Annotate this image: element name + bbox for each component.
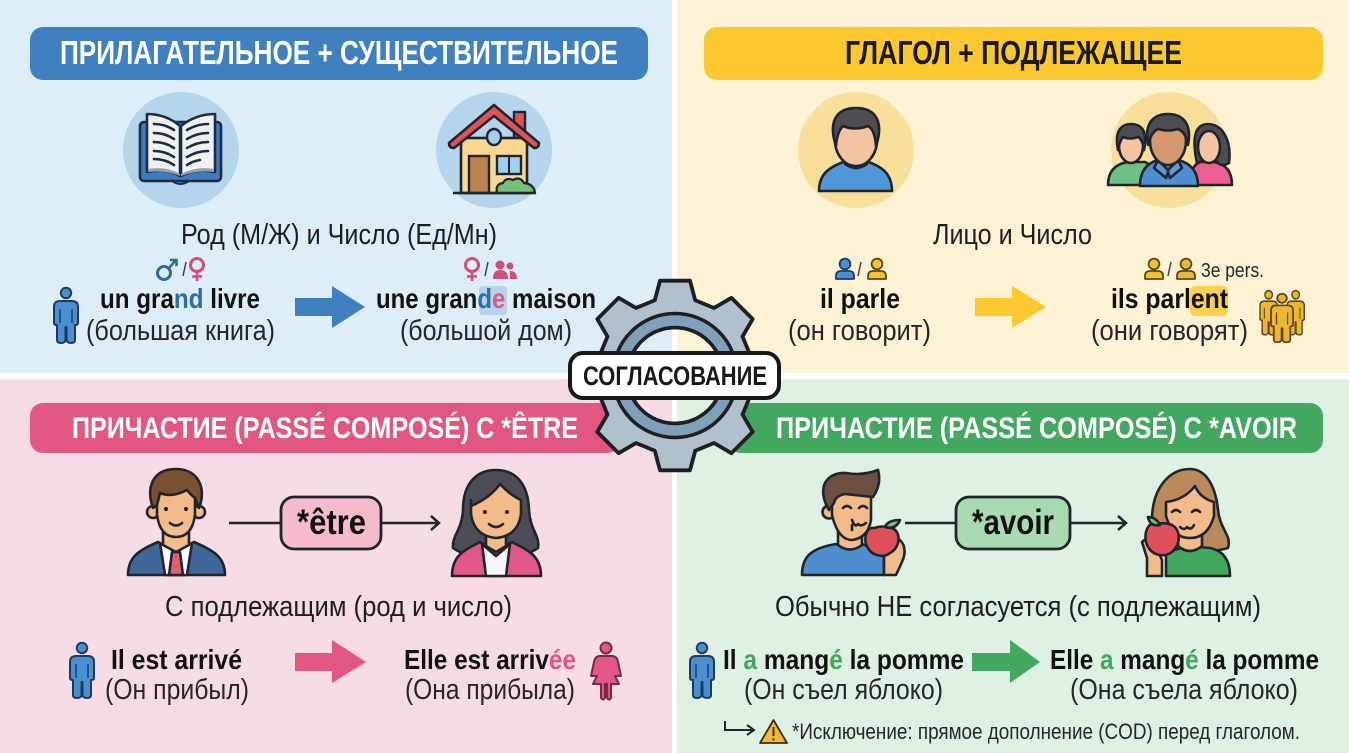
example: feminine plural	[376, 283, 596, 347]
icon: gold group figures	[1260, 291, 1304, 342]
connector with être label: *être	[297, 503, 366, 542]
example: singular verb: (он говорит)	[788, 315, 931, 347]
example: plural verb: (они говорят)	[1091, 315, 1248, 347]
icon: group of three people	[1108, 92, 1232, 208]
text: gender and number: Род (М/Ж) и Число (Ед/Мн)	[181, 219, 497, 251]
example: feminine with avoir: Elle a mangé la pomme	[1050, 644, 1319, 675]
example: feminine participle: (Она прибыла)	[405, 674, 575, 706]
icon: man in suit	[128, 469, 225, 575]
icons: feminine and plural symbols	[466, 258, 517, 281]
icons: person markers	[836, 259, 886, 279]
icons: third person markers	[1145, 259, 1264, 282]
icon: pink woman figure	[591, 642, 621, 700]
heading: participle with être: ПРИЧАСТИЕ (PASSÉ COMPOSÉ) C *ÊTRE	[72, 411, 578, 445]
icon: woman eating apple	[1142, 469, 1230, 576]
example: feminine with avoir	[1050, 644, 1319, 706]
heading: adjective + noun	[30, 27, 648, 80]
connector with être label	[229, 497, 439, 549]
heading: participle with avoir	[728, 403, 1323, 453]
example: masculine singular: un grand livre	[100, 283, 260, 314]
arrow: yellow	[975, 286, 1046, 328]
example: feminine participle	[404, 644, 576, 706]
panel: participle with avoir	[677, 379, 1349, 753]
arrow: hook to exception	[725, 721, 754, 735]
label: agreement	[570, 353, 779, 398]
icon: single person	[798, 92, 914, 208]
example: masculine with avoir: Il a mangé la pomme	[723, 644, 964, 675]
example: feminine participle: Elle est arrivée	[404, 644, 576, 675]
center gear with label	[570, 281, 779, 470]
arrow: green	[972, 640, 1040, 683]
example: masculine with avoir	[723, 644, 964, 706]
panel: verb + subject	[677, 0, 1349, 373]
text: with subject: С подлежащим (род и число)	[165, 591, 512, 623]
example: masculine participle: (Он прибыл)	[105, 674, 249, 706]
example: singular verb: il parle	[820, 283, 900, 314]
example: masculine singular: (большая книга)	[86, 315, 275, 347]
label: agreement: СОГЛАСОВАНИЕ	[583, 361, 767, 391]
example: masculine with avoir: (Он съел яблоко)	[744, 674, 943, 706]
connector with avoir label	[905, 497, 1126, 549]
heading: verb + subject: ГЛАГОЛ + ПОДЛЕЖАЩЕЕ	[845, 34, 1182, 71]
arrow: blue	[295, 286, 365, 328]
example: feminine plural: une grande maison	[376, 283, 596, 314]
connector with avoir label: *avoir	[972, 503, 1054, 542]
heading: adjective + noun: ПРИЛАГАТЕЛЬНОЕ + СУЩЕСТВИТЕЛЬНОЕ	[60, 34, 618, 71]
text: person and number: Лицо и Число	[933, 219, 1092, 251]
example: feminine plural: (большой дом)	[400, 315, 572, 347]
icon: man eating apple	[802, 470, 905, 575]
text: usually no agreement: Обычно НЕ согласуется (с подлежащим)	[775, 591, 1261, 623]
icon: blue person	[690, 643, 714, 698]
example: feminine with avoir: (Она съела яблоко)	[1070, 674, 1298, 706]
icon: open book	[123, 92, 239, 208]
icon: house	[436, 92, 552, 208]
icons: masculine and feminine symbols	[158, 258, 204, 281]
example: plural verb	[1091, 283, 1248, 347]
panel: adjective + noun	[0, 0, 672, 373]
example: masculine singular	[86, 283, 275, 347]
arrow: pink	[295, 640, 366, 683]
icon: warning triangle	[760, 720, 787, 743]
example: singular verb	[788, 283, 931, 347]
icon: woman in jacket	[452, 470, 541, 576]
heading: verb + subject	[704, 27, 1323, 80]
panel: participle with être	[0, 379, 672, 753]
heading: participle with être	[30, 403, 620, 453]
example: masculine participle: Il est arrivé	[111, 644, 242, 675]
example: plural verb: ils parlent	[1111, 283, 1228, 314]
icons: third person markers: 3e pers.	[1201, 260, 1264, 282]
icon: blue person	[54, 288, 78, 343]
icon: blue person	[70, 643, 94, 698]
example: masculine participle	[105, 644, 249, 706]
